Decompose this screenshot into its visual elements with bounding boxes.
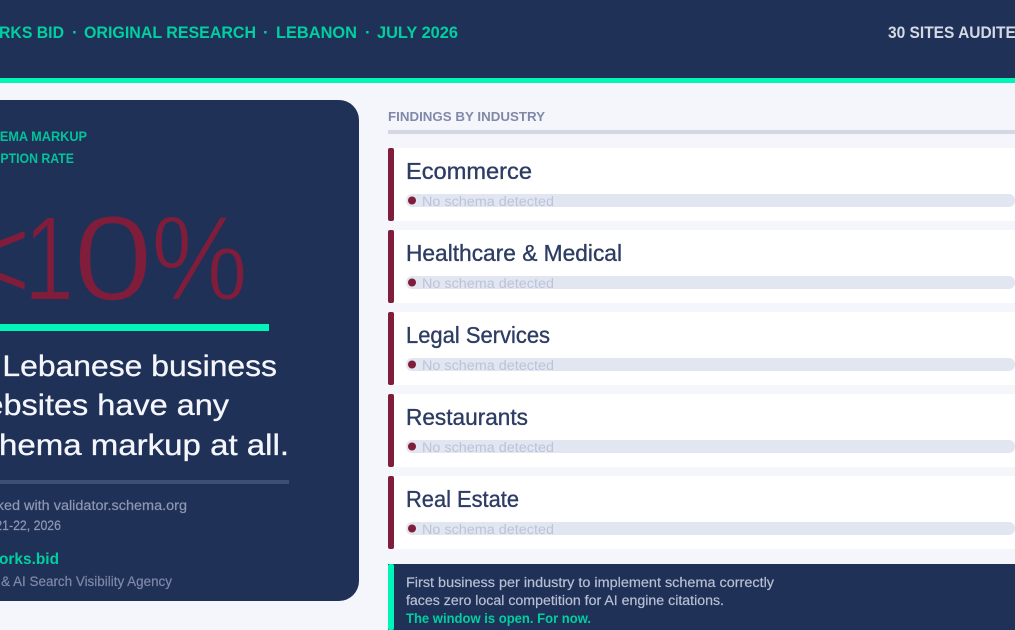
big stat: 1 <box>24 190 74 326</box>
accent bar <box>0 324 269 331</box>
big stat: % <box>151 190 248 326</box>
finding row: real estate <box>388 476 1015 549</box>
finding row: ecommerce: Ecommerce <box>406 158 532 184</box>
stat description <box>0 350 289 462</box>
callout: faces zero local competition for AI engine citations. <box>406 593 724 608</box>
finding row: restaurants <box>388 394 1015 467</box>
brand url: orks.bid <box>0 551 59 568</box>
finding row: healthcare: No schema detected <box>422 276 554 291</box>
stat eyebrow <box>0 129 87 166</box>
finding row: legal: Legal Services <box>406 322 550 348</box>
big stat <box>0 190 248 326</box>
finding row: real estate: No schema detected <box>422 522 554 537</box>
finding row: restaurants: Restaurants <box>406 404 528 430</box>
section heading <box>388 109 1015 134</box>
header left label: · <box>365 23 371 42</box>
header left label: LEBANON <box>276 23 357 42</box>
big stat: 0 <box>73 190 153 326</box>
header left label: · <box>72 23 78 42</box>
finding row: ecommerce: No schema detected <box>422 194 554 209</box>
finding row: legal: No schema detected <box>422 358 554 373</box>
header left label: ORIGINAL RESEARCH <box>84 23 256 42</box>
header left label: RKS BID <box>0 23 64 42</box>
callout: The window is open. For now. <box>406 611 591 626</box>
finding row: ecommerce <box>388 148 1015 221</box>
callout <box>388 564 1015 630</box>
header left label <box>0 23 458 42</box>
finding row: legal <box>388 312 1015 385</box>
finding row: healthcare <box>388 230 1015 303</box>
section heading: FINDINGS BY INDUSTRY <box>388 109 545 124</box>
header band <box>0 0 1015 83</box>
finding row: healthcare: Healthcare & Medical <box>406 240 622 266</box>
finding row: real estate: Real Estate <box>406 486 519 512</box>
callout: First business per industry to implement schema correctly <box>406 575 774 590</box>
finding row: restaurants: No schema detected <box>422 440 554 455</box>
header left label: JULY 2026 <box>377 23 458 42</box>
header left label: · <box>263 23 269 42</box>
method note <box>0 498 187 533</box>
panel: headline stat <box>0 100 359 601</box>
